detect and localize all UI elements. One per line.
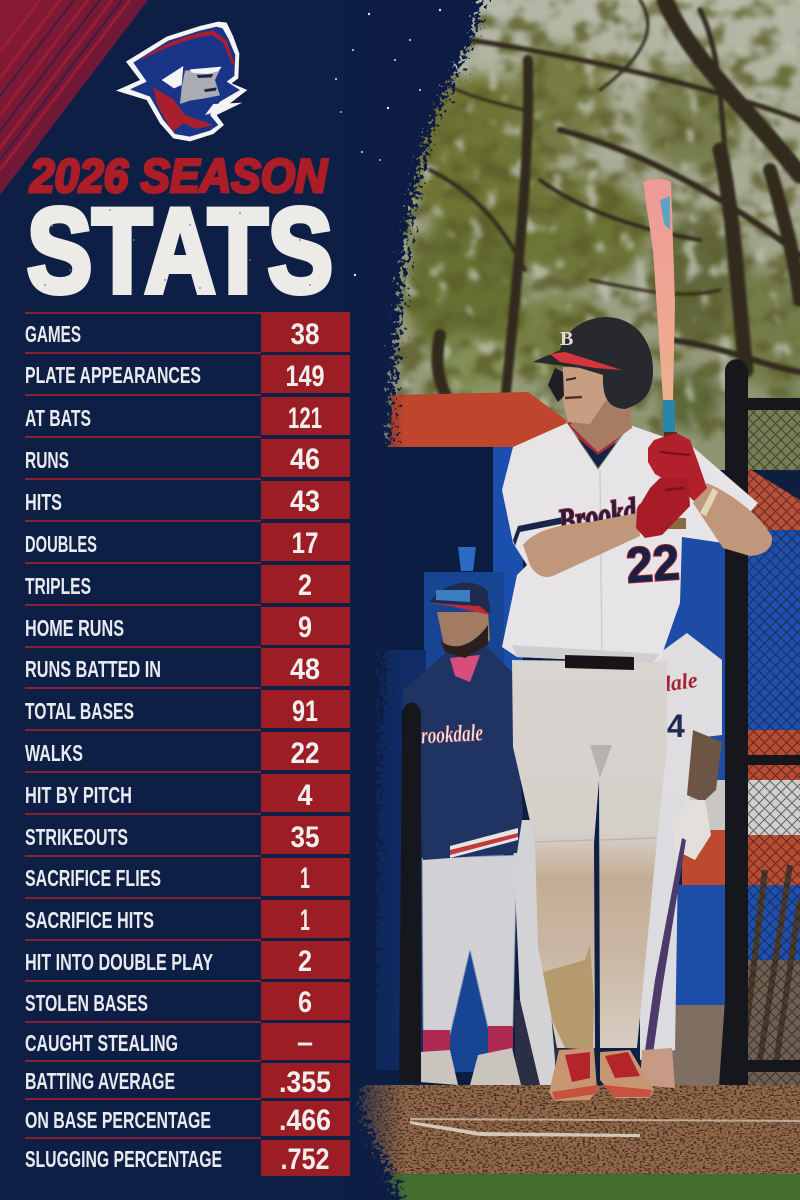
- row: caught stealing: –: [297, 1026, 313, 1059]
- jersey: [502, 420, 758, 663]
- batter: [502, 179, 772, 1101]
- row: batting average: [25, 1063, 350, 1100]
- helmet: B: [560, 328, 573, 350]
- photo background: trees and sky: [340, 0, 800, 470]
- row: walks: [25, 732, 350, 773]
- batting gloves: [636, 433, 707, 538]
- row: batting average: BATTING AVERAGE: [25, 1068, 175, 1094]
- row: walks: 22: [290, 737, 320, 770]
- row: at bats: AT BATS: [25, 405, 91, 431]
- row: caught stealing: CAUGHT STEALING: [25, 1030, 178, 1056]
- row: runs: [25, 439, 350, 480]
- row: doubles: 17: [292, 527, 318, 560]
- row: home runs: [25, 607, 350, 648]
- row: caught stealing: [25, 1023, 350, 1062]
- coach in navy jacket: [402, 583, 523, 1085]
- row: stolen bases: STOLEN BASES: [25, 990, 148, 1016]
- heading: 2026 season: 2026 SEASON: [29, 149, 328, 202]
- speckles along panel edge: [335, 9, 441, 276]
- row: hit into double play: HIT INTO DOUBLE PLAY: [25, 949, 213, 975]
- background player at right: dale: [658, 667, 699, 697]
- row: runs: RUNS: [25, 447, 69, 473]
- row: triples: [25, 565, 350, 606]
- row: sacrifice flies: SACRIFICE FLIES: [25, 865, 161, 891]
- dugout roof: [388, 392, 566, 447]
- row: sacrifice hits: [25, 900, 350, 941]
- row: runs batted in: 48: [290, 653, 320, 686]
- row: stolen bases: 6: [298, 986, 312, 1019]
- row: sacrifice flies: 1: [300, 862, 310, 895]
- row: hits: [25, 481, 350, 522]
- row: slugging percentage: SLUGGING PERCENTAGE: [25, 1146, 222, 1172]
- row: total bases: 91: [292, 695, 318, 728]
- batter pants: [512, 660, 667, 1048]
- belt: [565, 655, 634, 670]
- row: slugging percentage: [25, 1140, 350, 1176]
- cleats: [549, 1048, 654, 1101]
- row: hits: HITS: [25, 489, 62, 515]
- row: hit by pitch: [25, 774, 350, 815]
- fence posts and rail: [399, 359, 800, 1085]
- row: doubles: DOUBLES: [25, 531, 97, 557]
- row: home runs: 9: [298, 611, 312, 644]
- row: sacrifice hits: 1: [300, 904, 310, 937]
- row: sacrifice hits: SACRIFICE HITS: [25, 907, 154, 933]
- row: games: 38: [290, 318, 320, 351]
- wristband: [700, 488, 718, 516]
- row: total bases: TOTAL BASES: [25, 698, 134, 724]
- background player at right: [640, 633, 722, 1088]
- row: total bases: [25, 690, 350, 731]
- row: strikeouts: 35: [290, 821, 320, 854]
- row: runs batted in: [25, 648, 350, 689]
- row: triples: TRIPLES: [25, 573, 91, 599]
- row: hit by pitch: 4: [298, 779, 313, 812]
- row: slugging percentage: .752: [280, 1143, 330, 1176]
- row: plate appearances: PLATE APPEARANCES: [25, 362, 201, 388]
- arms: [523, 483, 772, 577]
- row: triples: 2: [298, 569, 312, 602]
- row: doubles: [25, 523, 350, 564]
- coach in navy jacket: rookdale: [420, 720, 484, 749]
- dugout walls: [345, 447, 735, 1097]
- row: strikeouts: [25, 816, 350, 857]
- red diagonal stripes, top left: [0, 0, 148, 195]
- heading: stats: STATS: [27, 184, 333, 318]
- row: at bats: 121: [288, 402, 322, 435]
- row: strikeouts: STRIKEOUTS: [25, 824, 128, 850]
- neck and face: [560, 367, 632, 452]
- row: on base percentage: ON BASE PERCENTAGE: [25, 1107, 211, 1133]
- blue cup: [458, 547, 476, 571]
- row: hit into double play: [25, 941, 350, 982]
- row: games: GAMES: [25, 321, 81, 347]
- row: hit by pitch: HIT BY PITCH: [25, 782, 132, 808]
- jersey script lettering: Brookdale: [555, 485, 670, 542]
- helmet: [533, 317, 653, 409]
- row: plate appearances: [25, 355, 350, 396]
- row: sacrifice flies: [25, 858, 350, 899]
- row: at bats: [25, 397, 350, 438]
- jersey number: 22: [624, 534, 681, 594]
- row: on base percentage: [25, 1101, 350, 1139]
- row: games: [25, 313, 350, 354]
- row: runs: 46: [290, 443, 320, 476]
- row: hit into double play: 2: [298, 945, 312, 978]
- team logo: patriot mascot head: [116, 22, 247, 141]
- navy panel with rough painted edge: [0, 0, 492, 1200]
- background player in the middle: [512, 820, 555, 1085]
- row: runs batted in: RUNS BATTED IN: [25, 656, 161, 682]
- row: plate appearances: 149: [286, 360, 324, 393]
- row: stolen bases: [25, 982, 350, 1023]
- row: walks: WALKS: [25, 740, 83, 766]
- row: hits: 43: [290, 485, 320, 518]
- background player at right: 4: [667, 708, 685, 744]
- row: on base percentage: .466: [279, 1104, 331, 1137]
- stats table: [25, 312, 350, 1176]
- infield dirt: [340, 1085, 800, 1177]
- leg brace: [543, 945, 594, 1050]
- fence background with coloured wall bands: [745, 400, 800, 1085]
- row: batting average: .355: [279, 1066, 331, 1099]
- row: home runs: HOME RUNS: [25, 615, 124, 641]
- outfield grass: [340, 1174, 800, 1200]
- bat: [643, 179, 686, 529]
